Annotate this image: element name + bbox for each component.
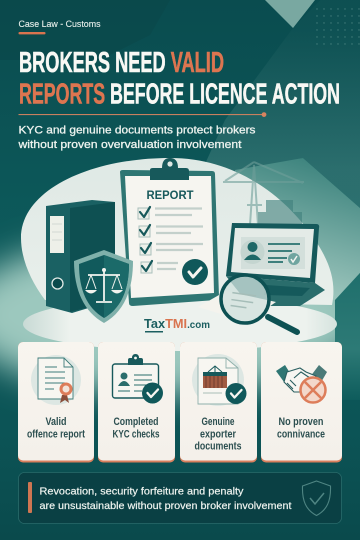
- shield with scales: [74, 250, 133, 323]
- label: [112, 416, 160, 440]
- banner text: are unsustainable without proven broker involvement: [40, 501, 292, 512]
- eyebrow label: Case Law - Customs: [18, 19, 101, 29]
- label: connivance: [277, 428, 325, 440]
- logo: TaxTMI.com: TaxTMI.com: [144, 316, 210, 331]
- port crane and containers: [223, 162, 304, 226]
- approved check: [182, 259, 208, 285]
- label: [194, 416, 242, 452]
- title divider: [18, 112, 266, 117]
- icon: handshake with cross: [276, 365, 327, 402]
- label: Genuine: [202, 416, 234, 428]
- banner text: [40, 486, 292, 512]
- card: valid offence report: [18, 342, 94, 462]
- icon: report with seal: [31, 355, 81, 405]
- icon: container document: [192, 354, 246, 406]
- label: Valid: [46, 416, 66, 428]
- subtitle: without proven overvaluation involvement: [17, 139, 242, 151]
- label: No proven: [278, 416, 324, 428]
- binder: [46, 200, 115, 313]
- illustration: report, binder, shield, laptop: [21, 158, 337, 351]
- banner text: Revocation, security forfeiture and penalty: [40, 486, 244, 498]
- label: documents: [194, 440, 242, 452]
- conclusion banner: [18, 472, 342, 524]
- card: no proven connivance: [261, 342, 342, 462]
- icon: KYC id badge: [112, 354, 163, 404]
- title: [19, 47, 340, 110]
- paper under magnifier: [198, 291, 276, 322]
- label: KYC checks: [112, 428, 160, 440]
- label: offence report: [27, 428, 85, 440]
- checklist: [138, 208, 152, 273]
- subtitle: KYC and genuine documents protect brokers: [18, 124, 256, 136]
- label: exporter: [200, 428, 237, 440]
- title: BROKERS NEED VALID: [19, 47, 224, 79]
- card: completed KYC checks: [98, 342, 175, 462]
- backdrop blob: [21, 158, 333, 305]
- platform: [23, 297, 337, 351]
- clipboard: [120, 158, 219, 306]
- clip: [150, 158, 189, 180]
- eyebrow label: [18, 19, 101, 34]
- icon: shield check: [302, 481, 331, 516]
- laptop: [226, 223, 325, 306]
- card: genuine exporter documents: [180, 342, 257, 462]
- report heading: REPORT: [146, 188, 194, 202]
- magnifying glass: [221, 275, 297, 332]
- label: Completed: [114, 416, 158, 428]
- subtitle: [17, 124, 256, 151]
- label: [277, 416, 325, 440]
- label: [27, 416, 85, 440]
